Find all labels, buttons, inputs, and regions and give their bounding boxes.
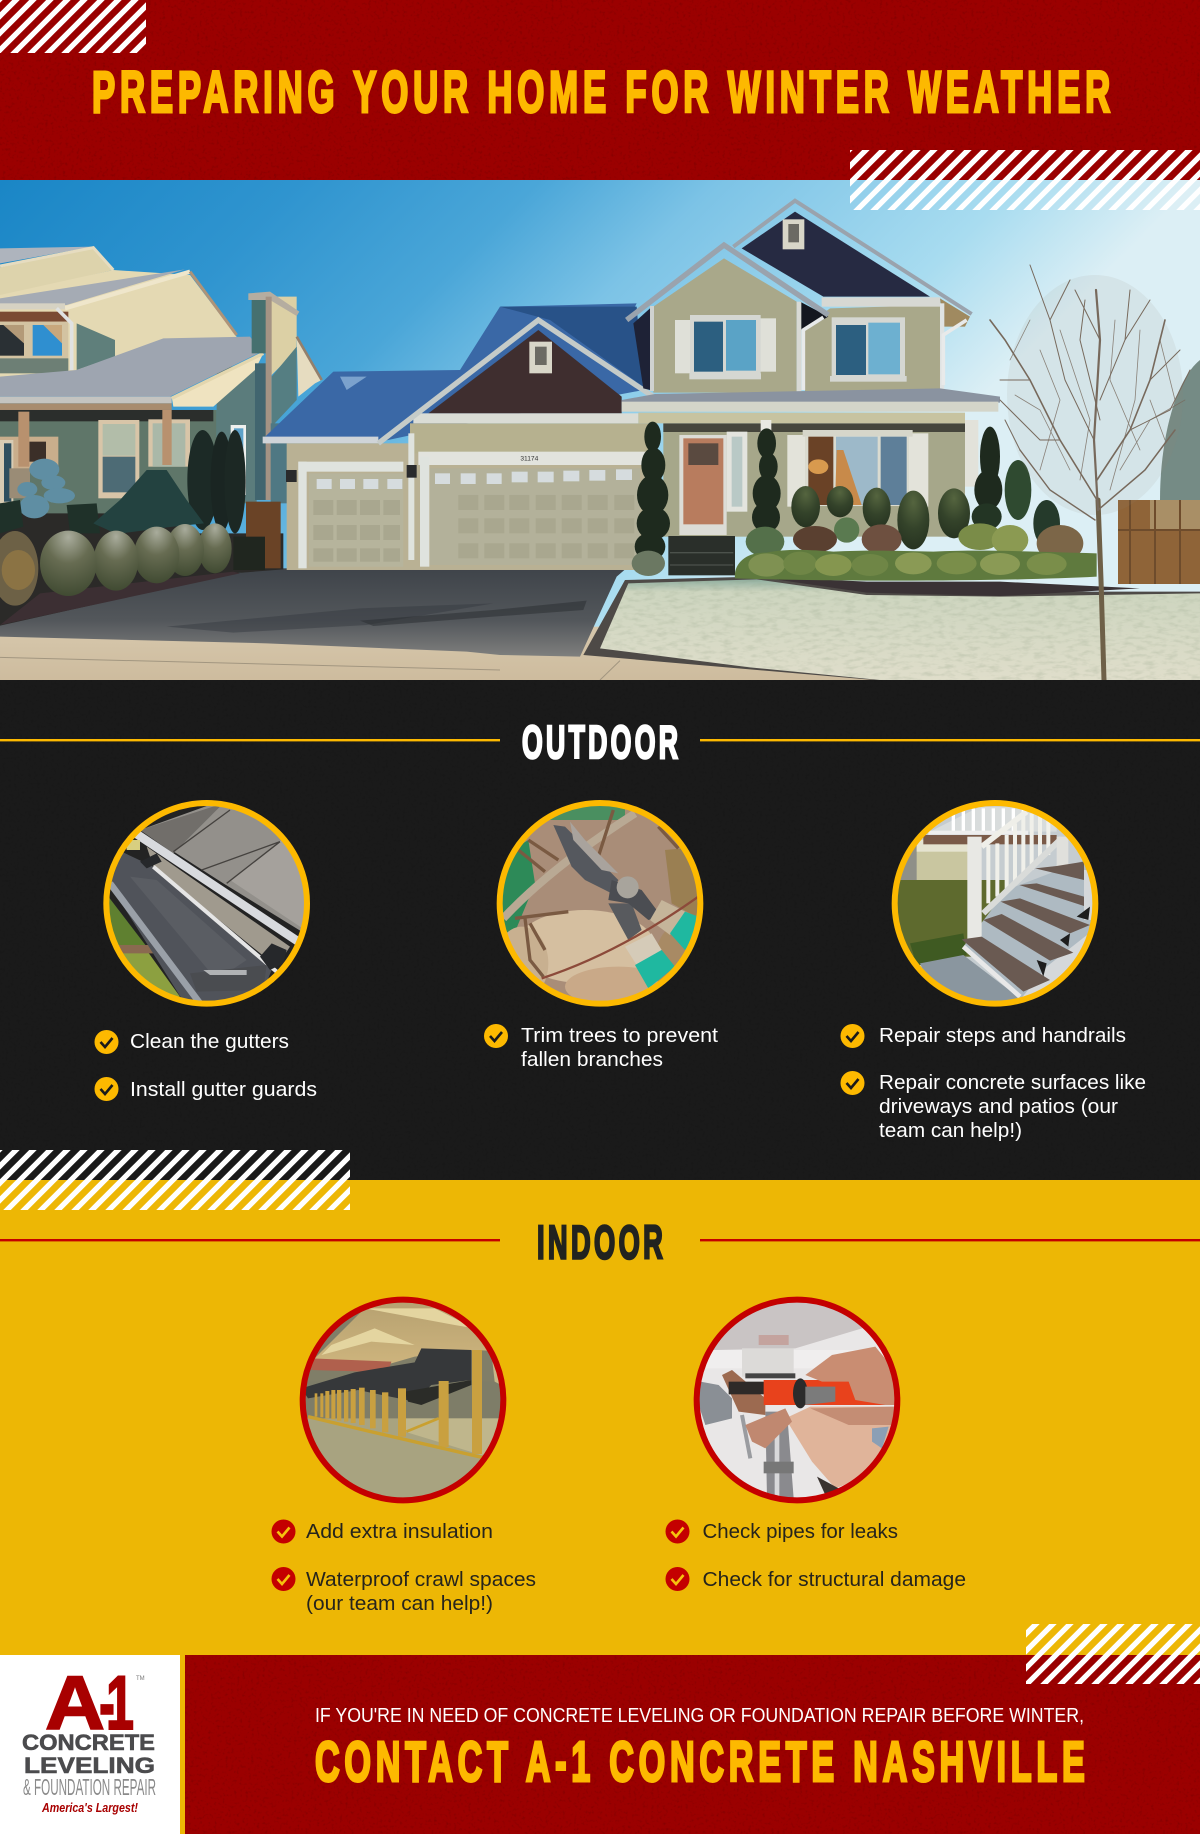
- item: repair concrete: [879, 1071, 1146, 1142]
- item: structural damage: Check for structural damage: [702, 1568, 966, 1591]
- item: waterproof crawl spaces: Waterproof crawl spaces: [306, 1568, 536, 1591]
- garage lamps: [407, 465, 417, 478]
- check icon: [840, 1024, 864, 1048]
- item: trim trees: fallen branches: [521, 1048, 663, 1071]
- divider stripes: [0, 1150, 350, 1210]
- distant trees: [1160, 360, 1200, 500]
- flowering low bushes: [834, 517, 859, 543]
- check icon: [272, 1520, 296, 1544]
- logo: A-1 Concrete Leveling: [0, 1655, 180, 1834]
- checklist: steps and concrete: [840, 1024, 1146, 1142]
- check icon: [272, 1567, 296, 1591]
- check icon: [666, 1520, 690, 1544]
- neighbour house: [0, 247, 322, 517]
- house number: 31174: [520, 456, 539, 463]
- check icon: [484, 1024, 508, 1048]
- check icon: [94, 1030, 118, 1054]
- spiral cypress: [635, 422, 1002, 561]
- upper windows: [675, 320, 692, 373]
- mulch bed: [0, 572, 240, 625]
- item: clean the gutters: Clean the gutters: [130, 1030, 289, 1053]
- clipped hedge shrubs: [791, 486, 820, 527]
- item: repair concrete: Repair concrete surfaces like: [879, 1071, 1146, 1094]
- panel: outdoor: [0, 680, 1200, 1180]
- bare tree: [990, 265, 1190, 680]
- porch: [663, 423, 965, 537]
- title: PREPARING YOUR HOME FOR WINTER WEATHER: [92, 61, 1110, 125]
- item: repair concrete: team can help!): [879, 1119, 1022, 1142]
- front steps: [668, 536, 735, 575]
- footer line: IF YOU'RE IN NEED OF CONCRETE LEVELING OR FOUNDATION REPAIR BEFORE WINTER,: [315, 1704, 1084, 1727]
- sky: [0, 180, 1200, 680]
- item: waterproof crawl spaces: (our team can help!): [306, 1592, 493, 1615]
- upper walls: [805, 305, 940, 392]
- photo circle: crawl space: [301, 1295, 508, 1508]
- photo circle: stairs and handrails: [893, 800, 1100, 1007]
- roof: [263, 303, 648, 442]
- logo: A-1 Concrete Leveling: America's Largest!: [41, 1800, 139, 1815]
- dark evergreen shrubs: [0, 500, 100, 533]
- header stripes right: [850, 150, 1200, 210]
- long hedge: [735, 550, 1097, 581]
- garden plants: [0, 430, 283, 626]
- logo: A-1 Concrete Leveling: CONCRETE: [22, 1730, 155, 1755]
- logo: A-1 Concrete Leveling: & FOUNDATION REPAIR: [23, 1774, 156, 1800]
- item: install gutter guards: Install gutter guards: [130, 1078, 317, 1101]
- item: check pipes: Check pipes for leaks: [702, 1520, 898, 1543]
- logo: A-1 Concrete Leveling: TM: [136, 1676, 145, 1682]
- topiary: [17, 459, 75, 518]
- item: waterproof crawl spaces: [306, 1568, 536, 1615]
- item: trim trees: Trim trees to prevent: [521, 1024, 718, 1047]
- checklist: pipes and damage: [666, 1520, 966, 1591]
- item: add insulation: Add extra insulation: [306, 1520, 493, 1543]
- fence: [1118, 500, 1200, 584]
- panel: indoor: [0, 1180, 1200, 1655]
- logo: A-1 Concrete Leveling: 1: [106, 1661, 134, 1746]
- check icon: [94, 1077, 118, 1101]
- neighbour cypress trees: [187, 430, 218, 530]
- footer stripes: [1026, 1624, 1200, 1684]
- upper dark gable: [742, 212, 930, 297]
- checklist: insulation and crawl spaces: [272, 1520, 536, 1615]
- checklist: trees: [484, 1024, 718, 1071]
- header stripes top-left: [0, 0, 146, 53]
- item: repair concrete: driveways and patios (our: [879, 1095, 1118, 1118]
- check icon: [840, 1071, 864, 1095]
- photo circle: plumber fixing pipes: [695, 1295, 902, 1508]
- check icon: [666, 1567, 690, 1591]
- ground: sidewalk, driveway, lawn: [0, 567, 1200, 683]
- item: repair steps: Repair steps and handrails: [879, 1024, 1126, 1047]
- planting bed backing: [0, 513, 283, 626]
- gable vent: [529, 342, 552, 373]
- garage walls: [287, 443, 650, 570]
- logo: A-1 Concrete Leveling: A: [45, 1661, 105, 1746]
- photo circle: gutter guards: [103, 800, 310, 1007]
- panel: footer: [0, 1655, 1200, 1834]
- logo: A-1 Concrete Leveling: LEVELING: [24, 1753, 155, 1778]
- footer call to action: CONTACT A-1 CONCRETE NASHVILLE: [315, 1729, 1085, 1793]
- shingle gable: [428, 330, 622, 413]
- front door: [679, 435, 727, 535]
- big porch window: [787, 435, 806, 507]
- item: trim trees: [521, 1024, 718, 1071]
- logo: A-1 Concrete Leveling: -: [99, 1661, 115, 1746]
- photo circle: pruning shears: [495, 800, 705, 1007]
- heading: indoor: INDOOR: [537, 1217, 663, 1270]
- checklist: gutters: [94, 1030, 317, 1101]
- heading: outdoor: OUTDOOR: [522, 716, 678, 768]
- photo: house with frosty lawn: [0, 180, 1200, 683]
- garage trim and doors: [298, 462, 403, 472]
- panel: header: [0, 0, 1200, 180]
- main house: [263, 201, 1000, 570]
- rounded frost shrubs: [198, 523, 232, 573]
